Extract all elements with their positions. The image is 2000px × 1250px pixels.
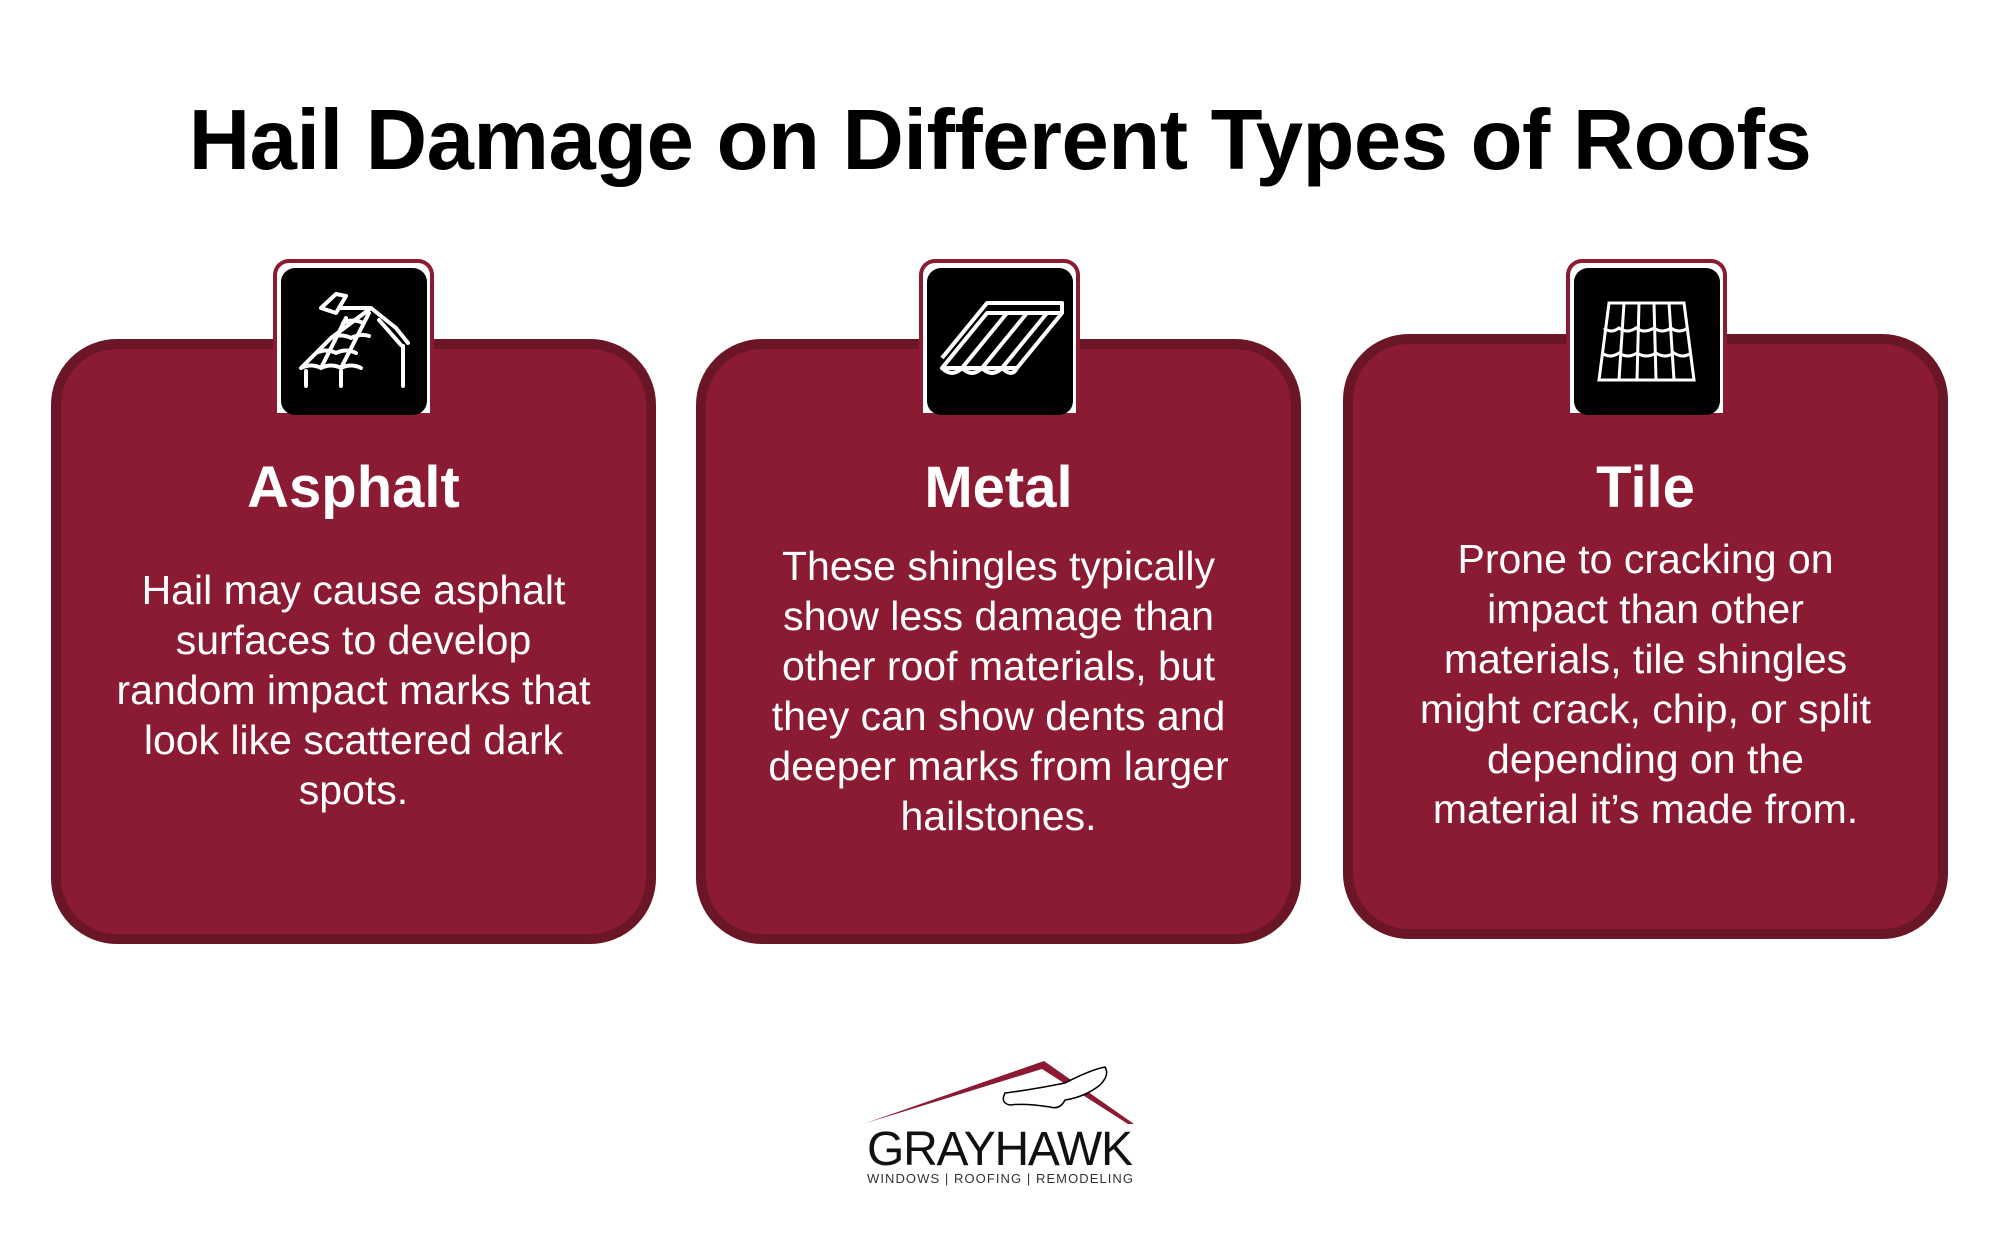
heading: asphalt: Asphalt [247,455,460,520]
panel: tile [1343,334,1948,939]
logo [866,1061,1134,1186]
text: tile: depending on the [1487,736,1804,782]
text: metal: deeper marks from larger [768,743,1229,789]
text: tile [1420,536,1871,832]
icon: metal roof [919,259,1080,413]
text: metal: These shingles typically [782,543,1215,589]
text: tile: Prone to cracking on [1457,536,1834,582]
title: Hail Damage on Different Types of Roofs [189,93,1811,188]
text: metal: hailstones. [900,793,1096,839]
text: metal [768,543,1229,839]
heading: tile: Tile [1596,455,1695,520]
text: asphalt: spots. [299,767,408,813]
logo: GRAYHAWK [867,1123,1133,1176]
text: asphalt: random impact marks that [117,667,590,713]
text: asphalt [117,567,590,813]
heading: metal: Metal [924,455,1073,520]
icon: tile roof [1566,259,1727,413]
text: tile: material it’s made from. [1433,786,1858,832]
text: metal: they can show dents and [772,693,1225,739]
text: asphalt: surfaces to develop [176,617,531,663]
text: asphalt: look like scattered dark [144,717,563,763]
text: asphalt: Hail may cause asphalt [142,567,565,613]
text: metal: other roof materials, but [782,643,1215,689]
logo: WINDOWS | ROOFING | REMODELING [867,1171,1133,1186]
icon: asphalt roof [273,259,434,413]
panel: asphalt [51,339,656,944]
text: tile: impact than other [1487,586,1804,632]
text: tile: might crack, chip, or split [1420,686,1871,732]
text: tile: materials, tile shingles [1444,636,1847,682]
panel: metal [696,339,1301,944]
text: metal: show less damage than [783,593,1214,639]
